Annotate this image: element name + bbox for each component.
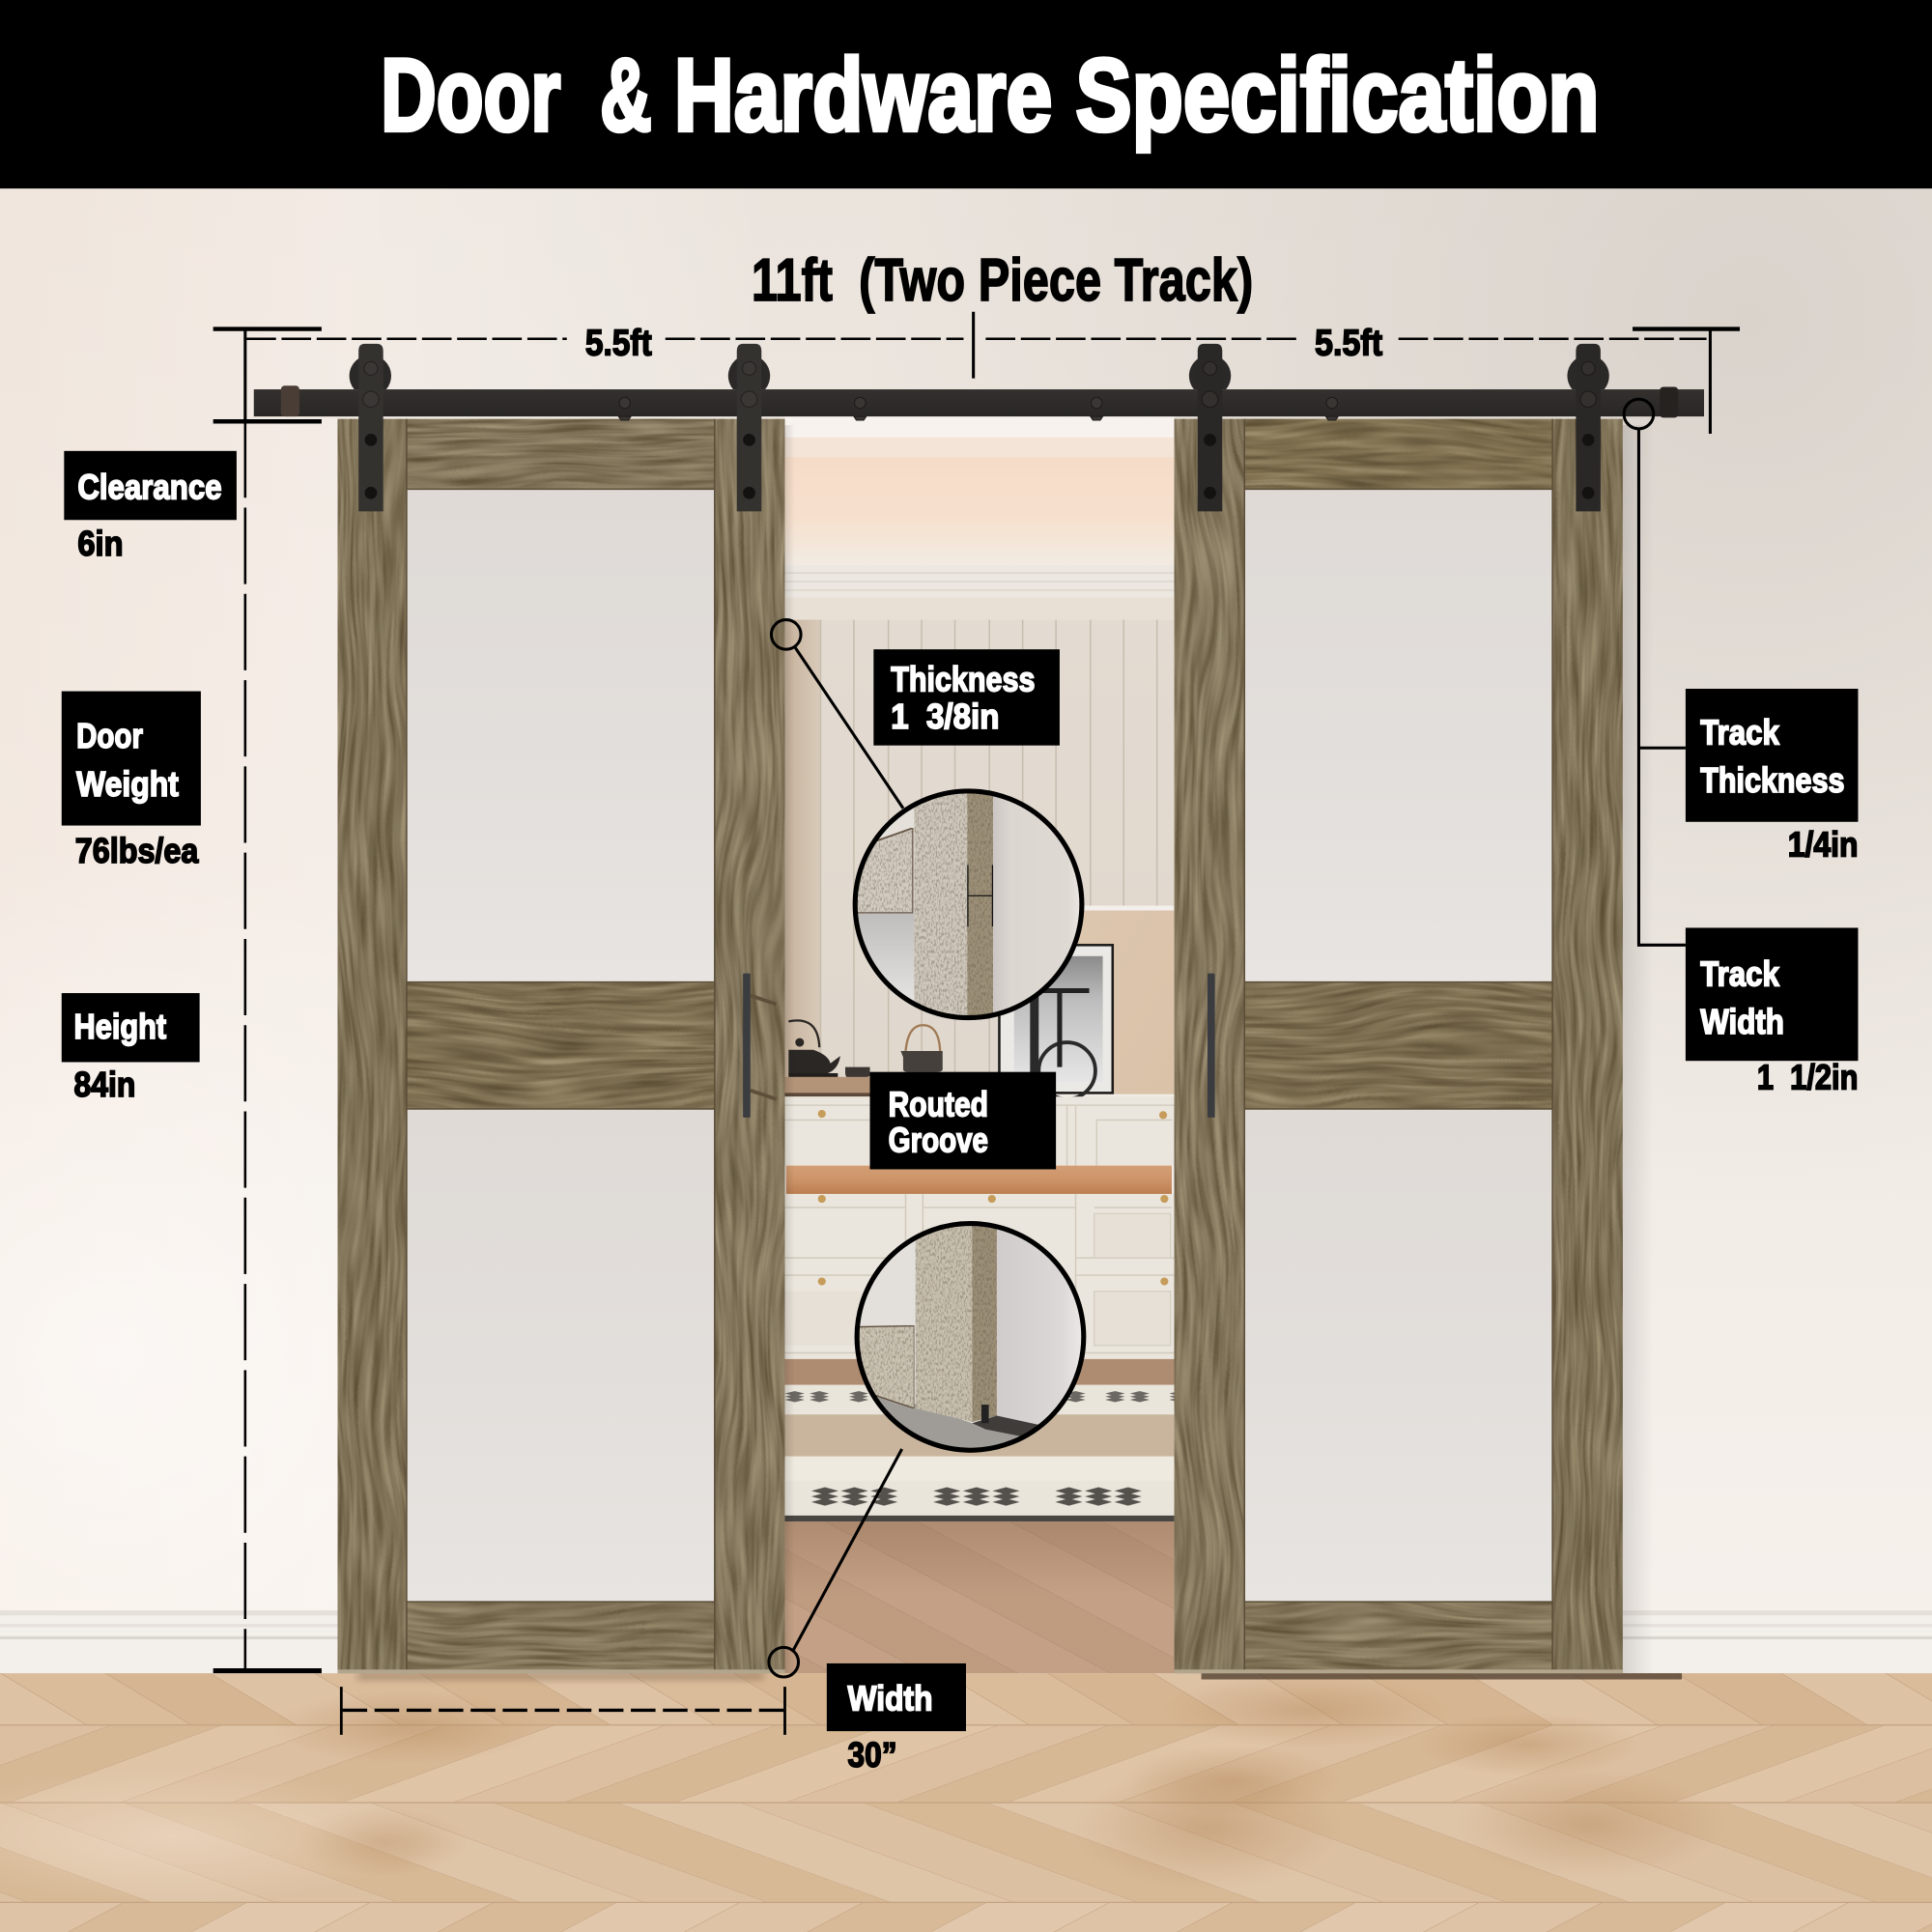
framed bicycle picture [998, 944, 1114, 1099]
left door handle [743, 974, 777, 1118]
magnifier: door thickness [850, 788, 1096, 1023]
groove notch [981, 1405, 989, 1423]
thickness callout leader [771, 620, 903, 809]
label: track width: Width [1700, 1003, 1784, 1041]
door panel detail [858, 828, 914, 914]
door height dimension line [213, 421, 322, 1671]
interior floor [784, 1521, 1175, 1673]
door edge [967, 788, 993, 1023]
label: track thickness [1686, 689, 1858, 822]
label: height [62, 993, 200, 1062]
left door frame stiles [337, 419, 784, 1673]
track stoppers [281, 385, 1678, 417]
label: height: Height [74, 1008, 166, 1046]
upper cabinets [784, 1096, 1175, 1166]
track callout lines [1624, 399, 1686, 945]
label: routed groove: Routed [889, 1086, 988, 1124]
label: track width: Track [1700, 954, 1779, 993]
door panel detail [860, 1325, 914, 1408]
title: Specification [1076, 37, 1600, 153]
hanger strap 4 [1567, 344, 1609, 511]
hanger strap 2 [728, 344, 770, 511]
value: width: 30” [848, 1736, 897, 1775]
label: width [827, 1663, 966, 1731]
crown moulding [784, 565, 1175, 620]
label: clearance [64, 451, 237, 520]
right door rails [1244, 419, 1552, 1673]
door width dimension line [341, 1687, 784, 1735]
herringbone floor [0, 1673, 1932, 1932]
label: thickness: Thickness [891, 661, 1035, 699]
lower cabinets [784, 1194, 1175, 1359]
door edge [972, 1220, 997, 1422]
left half track length: 5.5ft [585, 322, 652, 363]
label: routed groove [870, 1072, 1056, 1169]
hanger strap 1 [350, 344, 391, 511]
title [381, 37, 1600, 153]
value: track thickness: 1/4in [1788, 825, 1858, 864]
small kettle [900, 1025, 943, 1072]
label: track thickness: Track [1700, 713, 1779, 752]
title: & [600, 37, 652, 153]
hanger strap 3 [1189, 344, 1231, 511]
wood countertop [786, 1166, 1172, 1194]
baseboard [0, 1610, 1932, 1673]
door shadows [357, 425, 1682, 1680]
label: thickness [873, 649, 1060, 746]
label: thickness: 1 3/8in [891, 697, 999, 736]
right half track length: 5.5ft [1315, 322, 1382, 363]
value: height: 84in [74, 1065, 135, 1104]
door stile face [916, 1220, 972, 1422]
floor under door [877, 1397, 1020, 1448]
value: track width: 1 1/2in [1757, 1059, 1858, 1097]
label: door weight [62, 692, 201, 826]
label: door weight: Weight [76, 765, 179, 804]
wall background [0, 188, 1932, 1673]
value: door weight: 76lbs/ea [75, 832, 199, 870]
interior view through doorway [784, 416, 1175, 1673]
label: track width [1686, 927, 1858, 1061]
label: width: Width [848, 1679, 933, 1718]
right door frame stiles [1175, 419, 1623, 1673]
title bar [0, 0, 1932, 188]
barn door track [254, 385, 1704, 420]
track bolts [618, 397, 1338, 420]
left door rails [407, 419, 715, 1673]
cast iron teapot [788, 1020, 870, 1078]
label: door weight: Door [76, 717, 143, 755]
title: Hardware [674, 37, 1052, 153]
label: track thickness: Thickness [1700, 761, 1844, 800]
backsplash [1076, 911, 1175, 1094]
routed groove callout leader [769, 1449, 902, 1677]
door stile face [914, 788, 967, 1023]
right door handle [1208, 974, 1215, 1118]
beadboard wall panels [784, 620, 1175, 1078]
wooden tray [784, 1077, 871, 1096]
glass panels left door [407, 489, 715, 1602]
value: clearance: 6in [77, 525, 124, 563]
glass panels right door [1244, 489, 1552, 1602]
label: routed groove: Groove [889, 1122, 988, 1160]
right door [1175, 419, 1623, 1673]
title: Door [381, 37, 560, 153]
track length dimension lines [213, 312, 1740, 434]
patterned rug [784, 1385, 1175, 1521]
magnifier: routed groove [850, 1220, 1096, 1460]
label: clearance: Clearance [77, 469, 222, 507]
track total length heading: 11ft (Two Piece Track) [752, 246, 1253, 314]
thickness tick marks [968, 865, 992, 926]
left door [337, 419, 784, 1673]
